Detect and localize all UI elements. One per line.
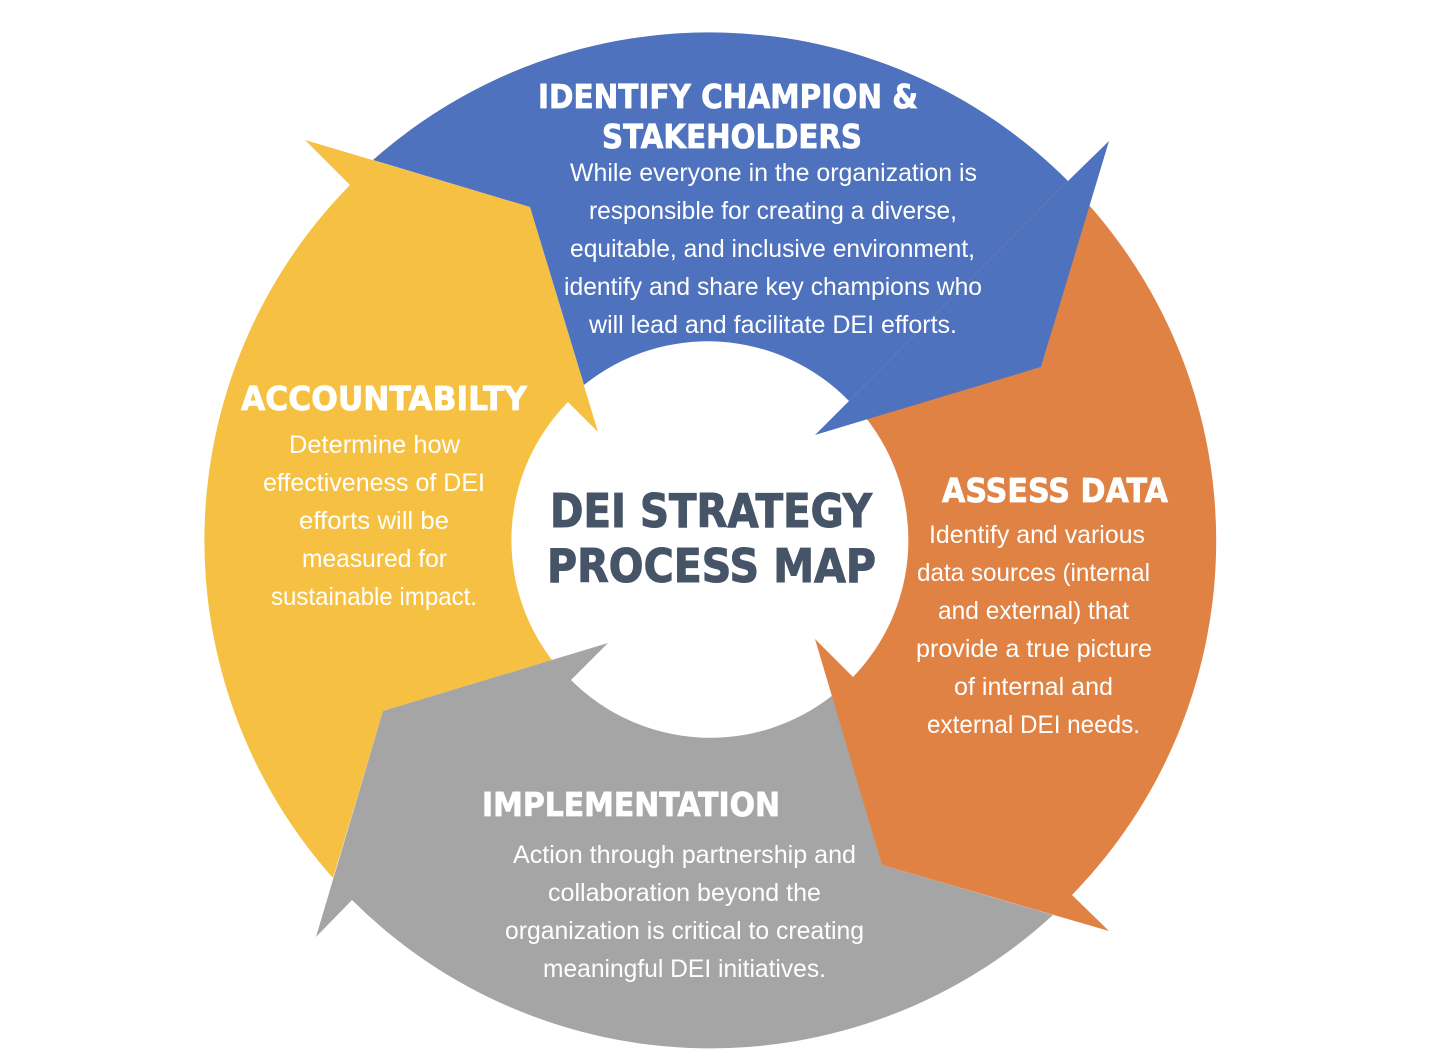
heading: implementation: IMPLEMENTATION	[482, 785, 780, 824]
text block: accountability description: efforts will be	[299, 507, 449, 535]
text block: implementation description: meaningful DEI initiatives.	[543, 955, 826, 983]
heading: identify champion and stakeholders	[538, 77, 918, 156]
text block: assess data description: and external) that	[938, 597, 1129, 625]
heading: identify champion and stakeholders: STAKEHOLDERS	[602, 117, 862, 156]
text block: implementation description: organization is critical to creating	[505, 917, 864, 945]
heading: identify champion and stakeholders: IDENTIFY CHAMPION &	[538, 77, 918, 116]
panel: assess data	[916, 471, 1168, 739]
text block: accountability description: measured for	[302, 545, 447, 573]
text block: accountability description: Determine how	[289, 431, 461, 459]
heading: accountability: ACCOUNTABILTY	[241, 379, 528, 418]
heading: assess data: ASSESS DATA	[942, 471, 1168, 510]
arrow: assess data segment	[815, 205, 1216, 931]
text block: implementation description	[505, 841, 864, 983]
text block: assess data description: external DEI needs.	[927, 711, 1140, 739]
title: PROCESS MAP	[547, 539, 876, 593]
arrow: identify champion segment	[373, 32, 1109, 435]
text block: accountability description	[263, 431, 485, 611]
text block: assess data description: Identify and various	[929, 521, 1145, 549]
text block: identify champion description: responsible for creating a diverse,	[589, 197, 957, 225]
arrow: implementation segment	[316, 643, 1053, 1048]
text block: identify champion description: While everyone in the organization is	[570, 159, 977, 187]
text block: identify champion description: identify and share key champions who	[564, 273, 982, 301]
panel: implementation	[482, 785, 864, 983]
title	[547, 484, 876, 593]
text block: assess data description: provide a true picture	[916, 635, 1152, 663]
text block: assess data description: data sources (internal	[917, 559, 1150, 587]
title: DEI STRATEGY	[550, 484, 873, 538]
text block: assess data description: of internal and	[954, 673, 1113, 701]
panel: identify champion and stakeholders	[538, 77, 982, 339]
text block: implementation description: collaboration beyond the	[548, 879, 821, 907]
panel: accountability	[241, 379, 528, 611]
text block: identify champion description: will lead and facilitate DEI efforts.	[588, 311, 957, 339]
arrow: accountability segment	[204, 140, 598, 878]
text block: implementation description: Action through partnership and	[513, 841, 856, 869]
text block: accountability description: effectiveness of DEI	[263, 469, 485, 497]
text block: identify champion description: equitable, and inclusive environment,	[570, 235, 975, 263]
text block: accountability description: sustainable impact.	[271, 583, 477, 611]
text block: assess data description	[916, 521, 1152, 739]
text block: identify champion description	[564, 159, 982, 339]
